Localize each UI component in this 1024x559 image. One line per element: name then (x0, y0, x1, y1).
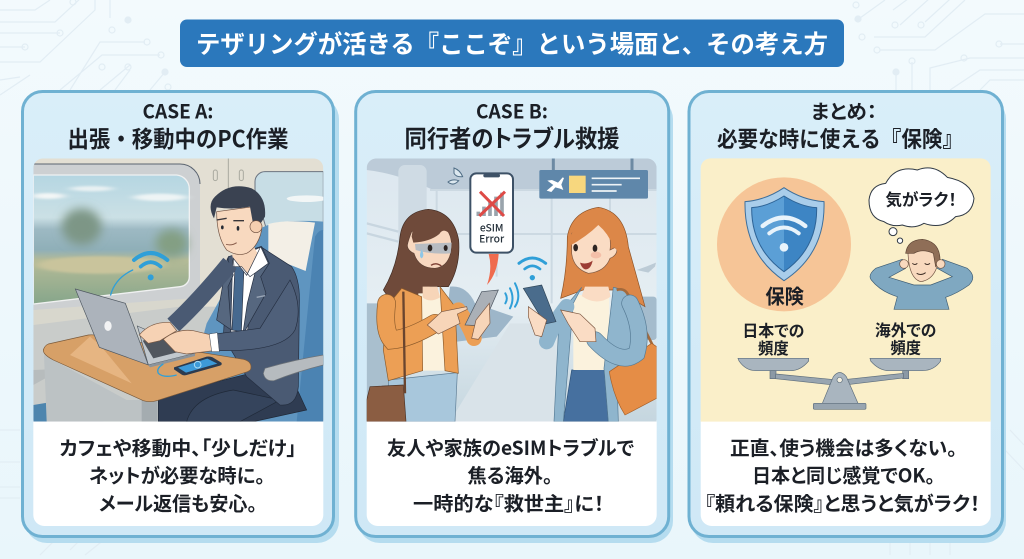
eSIM error phone: eSIM (480, 219, 504, 234)
illustration: two travellers at airport (367, 158, 657, 422)
heading: case B (404, 96, 620, 154)
heading: summary: 必要な時に使える『保険』 (717, 122, 963, 154)
caption box: summary: 『頼れる保険』と思うと気がラク！ (705, 488, 980, 516)
shield icon (745, 188, 824, 281)
eSIM error phone: Error (479, 231, 505, 246)
label: frequency abroad: 頻度 (890, 334, 921, 358)
table (43, 335, 251, 422)
circuit pattern left (0, 0, 171, 555)
helpful woman (523, 207, 657, 422)
seat (202, 220, 324, 422)
balance scale (738, 358, 941, 409)
wifi on laptop (111, 253, 167, 295)
caption box: case B: 焦る海外。 (468, 460, 552, 488)
caption box: summary: 日本と同じ感覚でOK。 (752, 460, 935, 488)
train window (32, 164, 200, 310)
caption box: case A: メール返信も安心。 (99, 488, 257, 516)
thought bubble (869, 168, 974, 243)
wifi icon (519, 258, 546, 280)
label: frequency in Japan: 日本での (742, 318, 804, 342)
illustration: insurance concept (701, 158, 991, 422)
caption box: case A (33, 420, 323, 526)
label: frequency abroad (875, 317, 936, 358)
laptop (75, 289, 195, 367)
thought bubble: 気がラク！ (885, 187, 957, 211)
circuit pattern right (853, 0, 1024, 555)
panel: case A (22, 92, 339, 543)
label: frequency in Japan (742, 318, 804, 359)
caption box: case A: カフェや移動中、「少しだけ」 (60, 432, 296, 461)
flight sign (539, 170, 648, 199)
label: insurance: 保険 (765, 280, 804, 309)
relaxed man (870, 239, 973, 309)
panel: case B (356, 92, 673, 543)
title banner (180, 20, 844, 67)
smartphone on table (158, 356, 222, 376)
hands and near arm (139, 280, 298, 354)
heading: case A (68, 96, 288, 154)
panel: summary (689, 92, 1006, 543)
heading: case A: CASE A: (142, 96, 214, 124)
title text: テザリングが活きる『ここぞ』という場面と、その考え方 (196, 25, 828, 61)
caption box: case B: 一時的な『救世主』に！ (413, 488, 604, 516)
right window (255, 172, 323, 230)
red pointer (487, 254, 499, 285)
label: frequency abroad: 海外での (875, 317, 936, 341)
heading: summary (717, 96, 963, 154)
heading: case B: 同行者のトラブル救援 (404, 119, 620, 154)
sweat drops (448, 168, 463, 184)
caption box: case B: 友人や家族のeSIMトラブルで (387, 432, 634, 461)
orange circle (717, 177, 851, 311)
caption box: case B (367, 420, 657, 526)
heading: summary: まとめ： (811, 96, 877, 124)
illustration: businessman on train (32, 158, 327, 422)
eSIM error phone (470, 173, 513, 253)
heading: case A: 出張・移動中のPC作業 (68, 120, 288, 154)
far arm (173, 263, 230, 325)
heading: case B: CASE B: (476, 96, 548, 124)
seat armrest (263, 355, 323, 381)
businessman body (158, 186, 307, 422)
caption box: summary (701, 420, 991, 526)
label: frequency in Japan: 頻度 (758, 335, 789, 359)
caption box: case A: ネットが必要な時に。 (89, 460, 265, 488)
caption box: summary: 正直、使う機会は多くない。 (730, 432, 957, 461)
worried woman (367, 209, 498, 422)
signal waves (505, 283, 518, 308)
